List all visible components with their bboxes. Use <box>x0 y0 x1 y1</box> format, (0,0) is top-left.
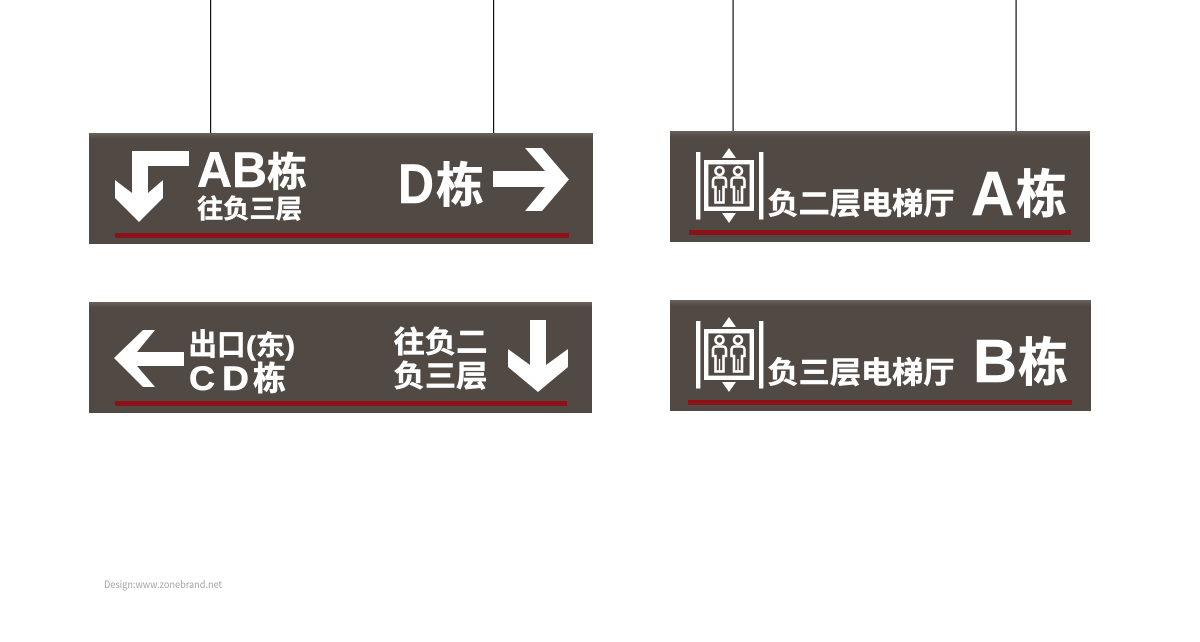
label: CD building: 栋 <box>253 360 286 397</box>
label: AB building: 栋 <box>267 151 307 195</box>
sign 1: AB and D building directions <box>89 0 593 244</box>
red bar <box>115 401 567 406</box>
red bar <box>688 400 1072 405</box>
label: B building: 栋 <box>1018 335 1068 393</box>
icon: left arrow <box>114 330 184 387</box>
icon: down arrow <box>508 320 568 392</box>
sign 4: B3 elevator hall B building <box>670 300 1091 411</box>
icon: right arrow <box>493 148 569 211</box>
label: B3: 负三层 <box>394 360 488 394</box>
red bar <box>115 233 569 238</box>
label: exit east: 出口 <box>188 329 246 362</box>
label: B building: B <box>973 327 1017 395</box>
label: AB building: AB <box>197 142 267 198</box>
icon: elevator <box>696 148 763 223</box>
label: A building: A <box>971 160 1014 229</box>
sign 3: exit and CD building, to B2 B3 <box>89 302 592 413</box>
label: D building: 栋 <box>436 160 484 213</box>
red bar <box>689 230 1071 235</box>
label: exit east: (东) <box>246 331 295 361</box>
label: to B3: 往负三层 <box>197 194 302 224</box>
label: CD building: D <box>222 360 249 398</box>
label: B3 elevator hall: 负三层电梯厅 <box>768 357 954 390</box>
sign 2: B2 elevator hall A building <box>670 0 1090 242</box>
label: D building: D <box>398 152 434 215</box>
label: A building: 栋 <box>1016 167 1067 225</box>
icon: elevator <box>696 317 763 392</box>
label: CD building: C <box>189 360 215 398</box>
label: to B2: 往负二 <box>394 326 488 360</box>
icon: bent down arrow <box>115 151 189 222</box>
design credit: Design:www.zonebrand.net <box>104 576 222 591</box>
label: B2 elevator hall: 负二层电梯厅 <box>768 188 954 221</box>
